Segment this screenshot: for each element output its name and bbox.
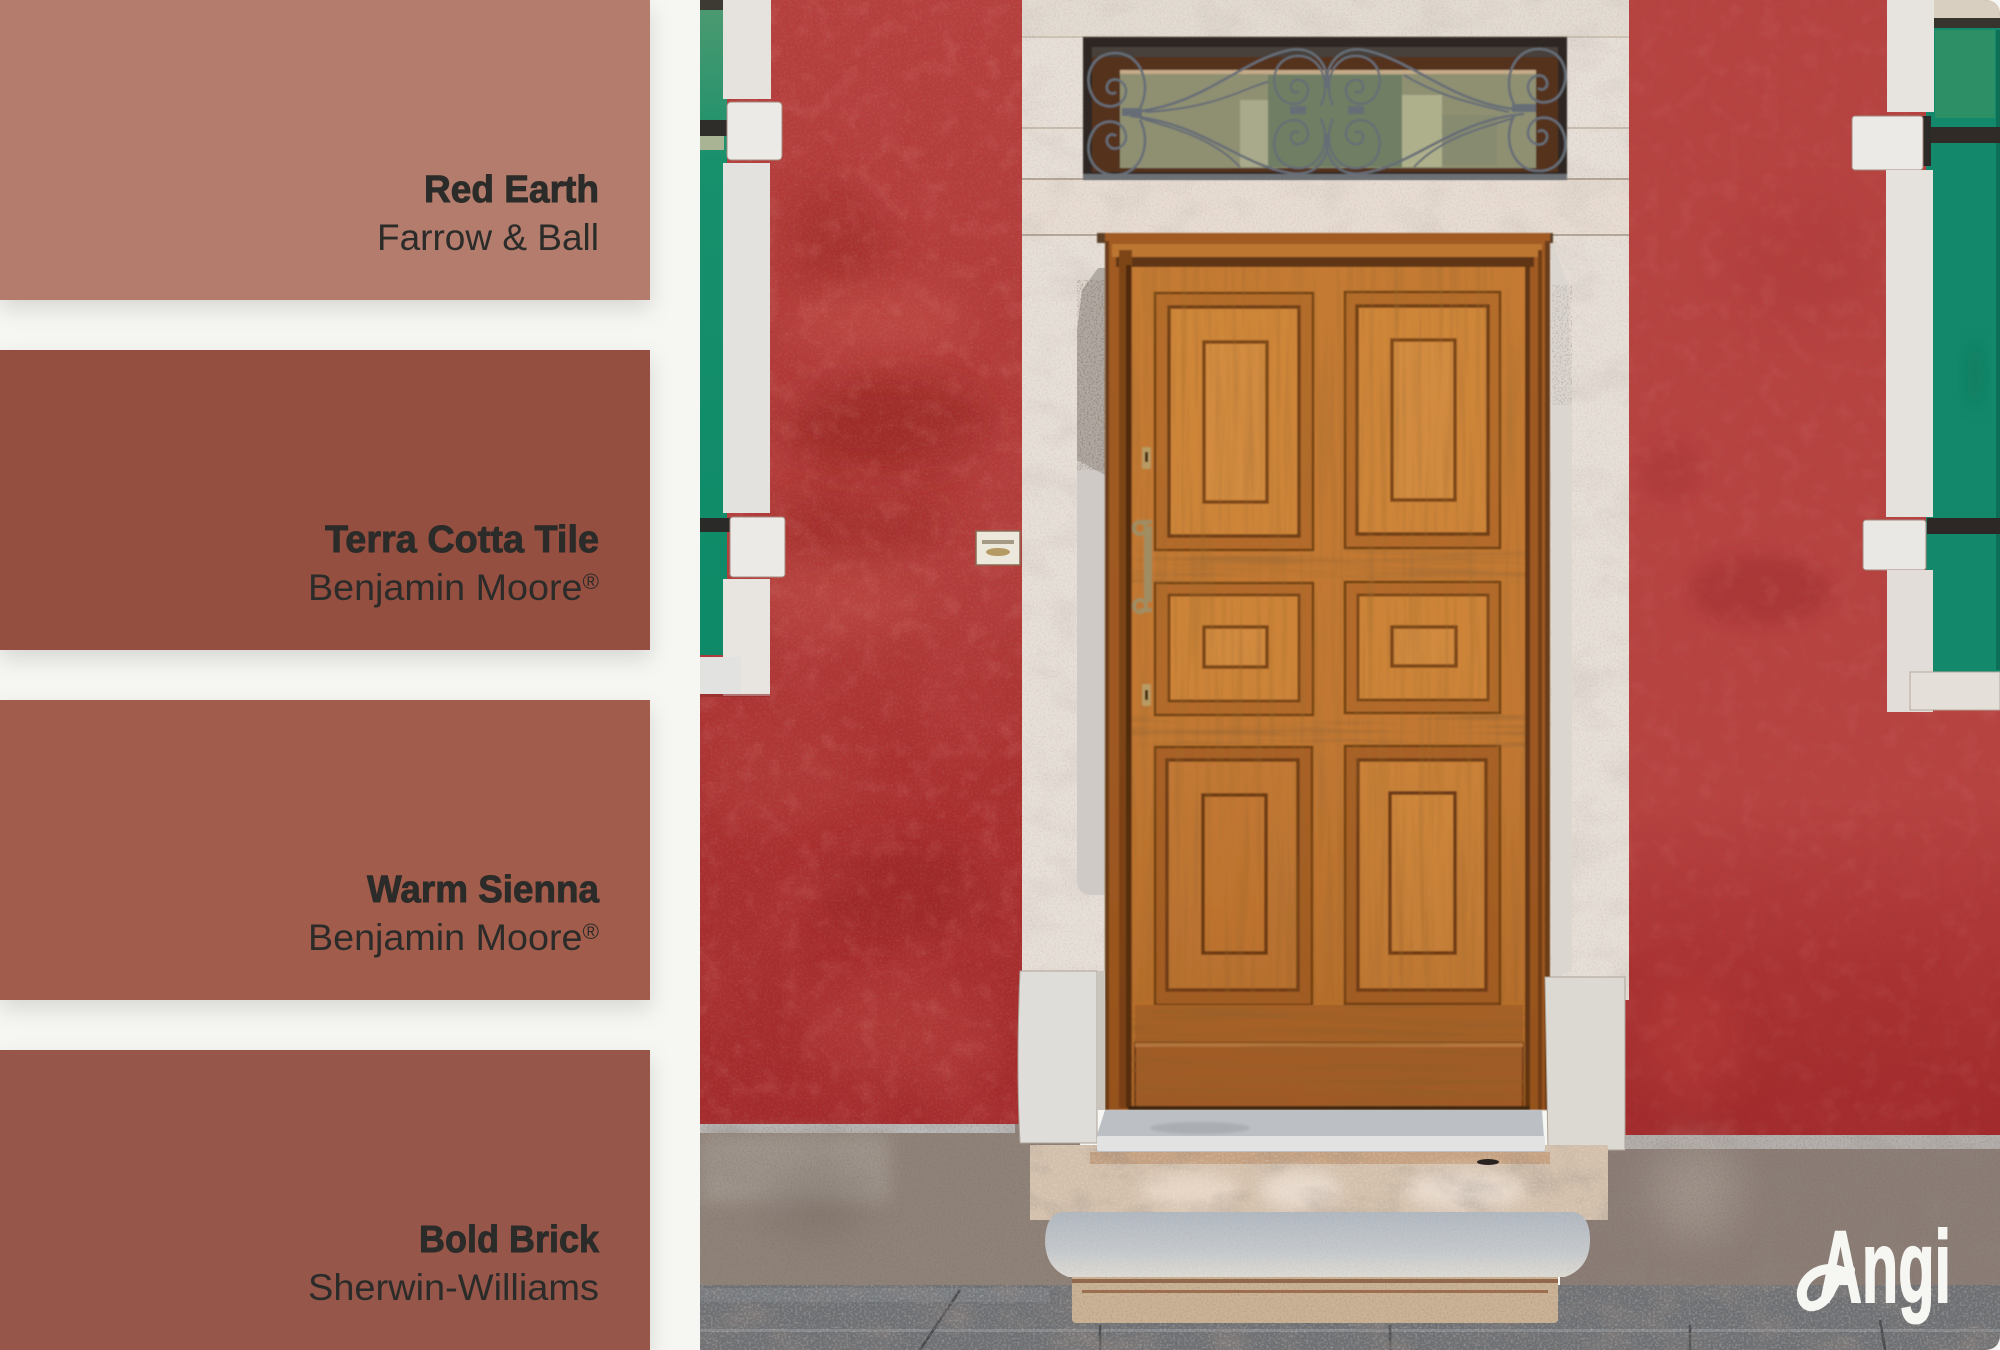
grey base below right wall bbox=[1560, 1135, 2000, 1290]
label: Benjamin Moore brand: Benjamin Moore bbox=[308, 917, 577, 958]
swatch: Warm Sienna bbox=[0, 700, 650, 1000]
icon: small wall plaque bbox=[976, 531, 1020, 565]
label: Benjamin Moore brand: Benjamin Moore bbox=[308, 567, 577, 608]
left green shutter and stone jamb bbox=[700, 0, 785, 697]
stone plinths bbox=[1018, 971, 1625, 1150]
label: Terra Cotta Tile name: Terra Cotta Tile bbox=[325, 519, 599, 561]
middle right panel bbox=[1345, 582, 1500, 713]
upper left panel bbox=[1155, 293, 1313, 550]
door frame bbox=[1097, 233, 1553, 1110]
glass reflections bbox=[1240, 74, 1442, 168]
right green shutter and stone jamb bbox=[1852, 0, 2000, 712]
label: Benjamin Moore brand: ® bbox=[582, 919, 599, 944]
swatch: Red Earth bbox=[0, 0, 650, 300]
lower step base bbox=[1072, 1270, 1558, 1323]
lower step slab bbox=[1045, 1212, 1590, 1277]
label: Sherwin-Williams brand: Sherwin-Williams bbox=[308, 1267, 599, 1308]
logo: Angi bbox=[1802, 1210, 1951, 1324]
middle left panel bbox=[1155, 583, 1313, 715]
door leaf bbox=[1132, 267, 1525, 1108]
key escutcheons bbox=[1142, 447, 1151, 706]
threshold slab bbox=[1097, 1110, 1545, 1152]
wood grain bbox=[1105, 267, 1550, 1110]
panel: photo of red house with wooden door bbox=[690, 0, 2000, 1350]
kick plate bbox=[1135, 1005, 1523, 1108]
label: Red Earth name: Red Earth bbox=[424, 169, 599, 211]
pavement bbox=[700, 1285, 2000, 1350]
transom window with wrought iron scrollwork bbox=[1083, 37, 1567, 180]
label: Bold Brick name: Bold Brick bbox=[419, 1219, 600, 1261]
grey base below left wall bbox=[700, 1124, 1080, 1294]
lower left panel bbox=[1155, 747, 1312, 1005]
weathered jamb recesses bbox=[1077, 240, 1572, 980]
door handle bbox=[1134, 522, 1152, 612]
right red wall bbox=[1625, 0, 2000, 1140]
iron scrolls bbox=[1088, 49, 1566, 175]
swatch: Terra Cotta Tile bbox=[0, 350, 650, 650]
upper right panel bbox=[1345, 292, 1500, 548]
wall texture bbox=[700, 0, 2000, 1140]
label: Warm Sienna name: Warm Sienna bbox=[367, 869, 600, 911]
label: Farrow & Ball brand: Farrow & Ball bbox=[377, 217, 599, 258]
wooden door bbox=[1097, 233, 1553, 1110]
stone door surround bbox=[1022, 0, 1629, 1000]
panel: paint swatches bbox=[0, 0, 650, 1350]
lower right panel bbox=[1345, 746, 1500, 1004]
swatch: Bold Brick bbox=[0, 1050, 650, 1350]
stone under threshold bbox=[1030, 1145, 1608, 1220]
label: Benjamin Moore brand: ® bbox=[582, 569, 599, 594]
left red wall bbox=[690, 0, 1025, 1130]
